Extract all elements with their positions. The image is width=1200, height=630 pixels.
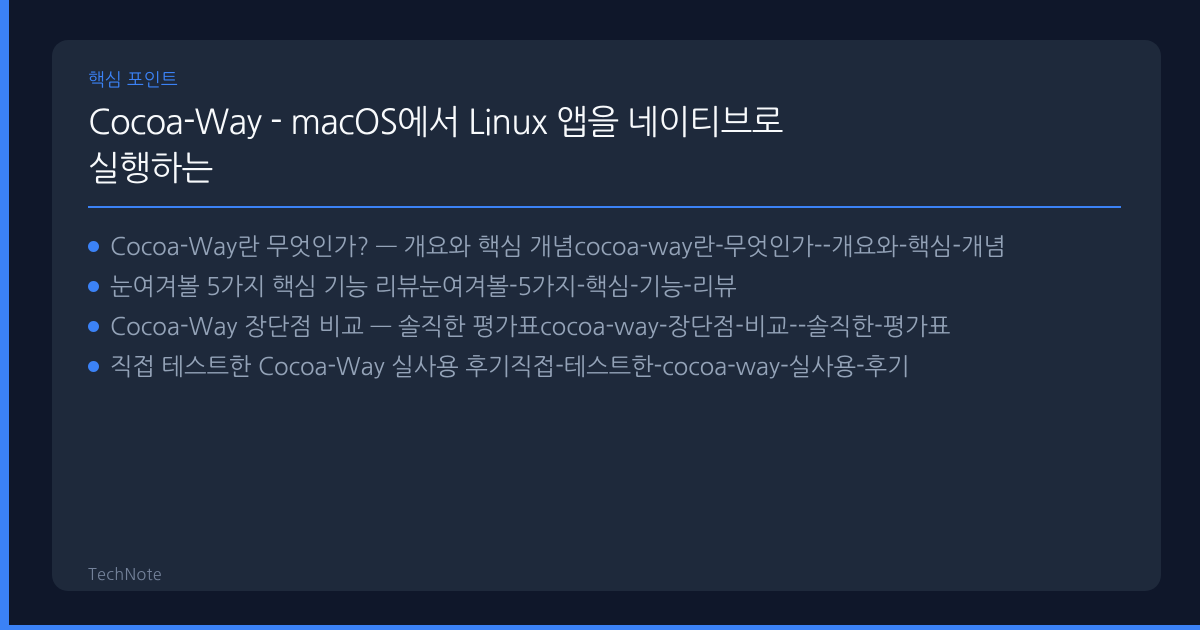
- eyebrow label: 핵심 포인트: [88, 71, 178, 89]
- title: [88, 105, 783, 185]
- bullet item 3: Cocoa-Way 장단점 비교 — 솔직한 평가표cocoa-way-장단점-비교--솔직한-평가표: [110, 315, 950, 339]
- divider: [88, 206, 1121, 208]
- title: Cocoa-Way - macOS에서 Linux 앱을 네이티브로: [88, 105, 783, 139]
- left accent bar: [0, 0, 9, 630]
- footer brand: TechNote: [88, 567, 162, 583]
- bullet list: [88, 235, 1006, 379]
- bottom accent bar: [0, 625, 1200, 630]
- bullet item 4: 직접 테스트한 Cocoa-Way 실사용 후기직접-테스트한-cocoa-way-실사용-후기: [110, 355, 909, 379]
- bullet item 2: 눈여겨볼 5가지 핵심 기능 리뷰눈여겨볼-5가지-핵심-기능-리뷰: [110, 275, 736, 299]
- bullet item 1: Cocoa-Way란 무엇인가? — 개요와 핵심 개념cocoa-way란-무엇인가--개요와-핵심-개념: [110, 235, 1006, 259]
- title: 실행하는: [88, 151, 213, 185]
